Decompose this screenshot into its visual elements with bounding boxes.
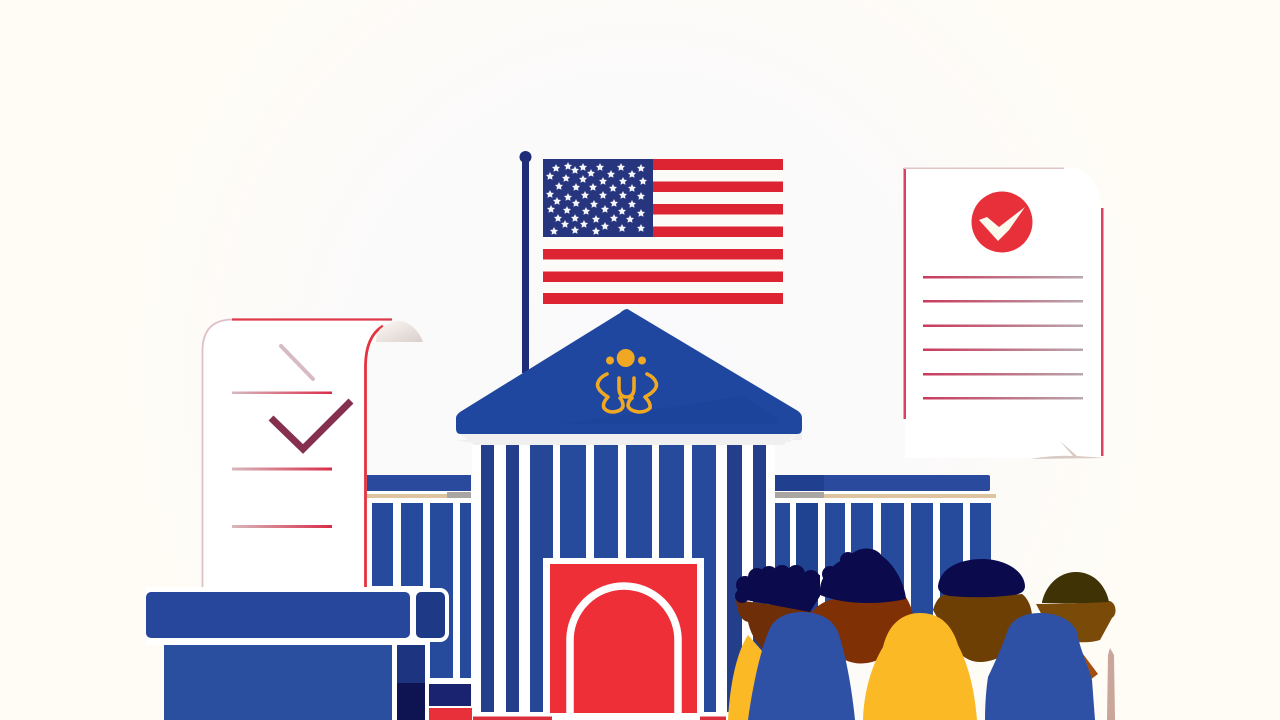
doc line: [232, 392, 332, 394]
icon: page curl: [1030, 441, 1106, 459]
panel: left wing of building: [367, 475, 473, 684]
person: far right head: [1036, 572, 1116, 720]
doc line: [923, 276, 1083, 278]
doc line: [923, 324, 1083, 327]
doc line: [923, 348, 1083, 351]
person: centre left head: [812, 548, 914, 664]
icon: red door with arch: [473, 558, 726, 720]
box body: [164, 645, 392, 720]
panel: ballot box: [146, 587, 472, 720]
person: yellow body centre: [863, 613, 977, 720]
icon: small grey tick: [281, 346, 313, 379]
icon: american flag: [543, 159, 783, 304]
person: far left: [728, 565, 820, 720]
box side shadow: [397, 683, 425, 720]
panel: crowd of people: [728, 548, 1116, 720]
small red block: [429, 708, 472, 720]
box lid: [146, 592, 410, 638]
doc line: [923, 397, 1083, 400]
panel: right wing of building: [773, 475, 996, 631]
person: centre right head: [933, 559, 1032, 662]
icon: gold emblem: [598, 349, 656, 412]
panel: right document: [904, 168, 1106, 459]
doc line: [923, 373, 1083, 376]
icon: red check badge: [972, 192, 1032, 252]
box side: [397, 645, 425, 683]
person: blue body left: [748, 612, 855, 720]
doc line: [923, 300, 1083, 302]
doc line: [232, 468, 332, 470]
icon: check mark: [271, 401, 351, 449]
person: blue body right: [985, 613, 1095, 720]
lid side: [416, 592, 445, 638]
small block: [429, 684, 471, 706]
icon: scroll curl: [376, 321, 423, 342]
doc line: [232, 525, 332, 528]
panel: central building colonnade: [472, 440, 775, 720]
panel: pediment roof: [456, 309, 802, 445]
panel: left scroll document: [202, 320, 423, 587]
icon: flag pole: [520, 151, 532, 373]
